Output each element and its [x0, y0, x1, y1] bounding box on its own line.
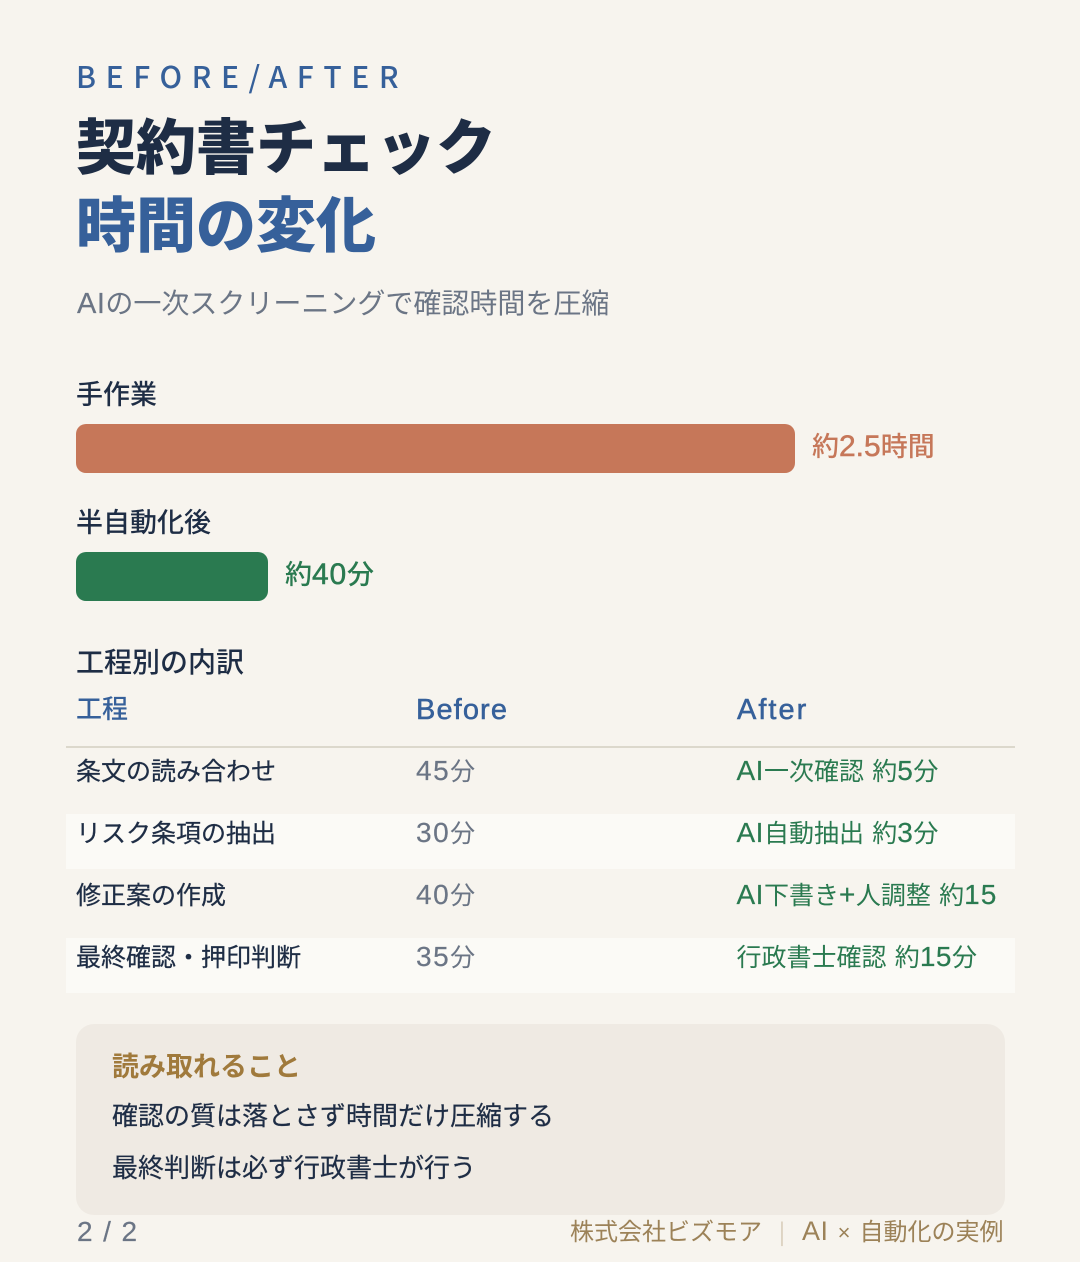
row 1: 45分	[416, 752, 475, 788]
table	[66, 689, 1015, 974]
footer credit: |	[779, 1215, 785, 1247]
row 4: 最終確認・押印判断	[76, 938, 301, 974]
bar label: manual: 手作業	[76, 373, 157, 412]
bar label: semi-automated: 半自動化後	[76, 501, 211, 540]
table header: Before	[416, 694, 508, 726]
table header	[66, 690, 1015, 748]
row 4: 行政書士確認 約15分	[736, 938, 977, 974]
page number: 2 / 2	[77, 1216, 138, 1247]
row 2	[66, 814, 1015, 869]
bar: semi-automated	[76, 552, 268, 601]
row 3: AI下書き+人調整 約15	[736, 876, 997, 912]
eyebrow: BEFORE/AFTER	[76, 53, 408, 97]
footer credit: ×	[838, 1220, 850, 1245]
table header: After	[737, 694, 808, 726]
takeaway panel	[76, 1024, 1005, 1215]
title line 2: 時間の変化	[76, 178, 376, 265]
row 1: AI一次確認 約5分	[736, 752, 938, 788]
row 4: 35分	[416, 938, 475, 974]
row 2: リスク条項の抽出	[76, 814, 276, 850]
title line 1: 契約書チェック	[76, 100, 496, 187]
row 1: 条文の読み合わせ	[76, 752, 276, 788]
table header: 工程	[76, 689, 128, 726]
subtitle: AIの一次スクリーニングで確認時間を圧縮	[77, 282, 609, 322]
row 4	[66, 938, 1015, 993]
bar value: manual: 約2.5時間	[812, 425, 935, 464]
row 3: 修正案の作成	[76, 876, 226, 912]
row 2: AI自動抽出 約3分	[736, 814, 938, 850]
row 2: 30分	[416, 814, 475, 850]
panel heading: 読み取れること	[112, 1045, 301, 1084]
row 1	[76, 752, 938, 788]
bar: manual	[76, 424, 795, 473]
row 3: 40分	[416, 876, 475, 912]
point 2: 最終判断は必ず行政書士が行う	[112, 1148, 476, 1185]
bar value: semi-automated: 約40分	[285, 553, 374, 592]
table heading: 工程別の内訳	[76, 641, 244, 681]
row 3	[76, 876, 997, 912]
point 1: 確認の質は落とさず時間だけ圧縮する	[112, 1096, 554, 1133]
footer credit: 株式会社ビズモア AI 自動化の実例	[570, 1212, 1004, 1247]
